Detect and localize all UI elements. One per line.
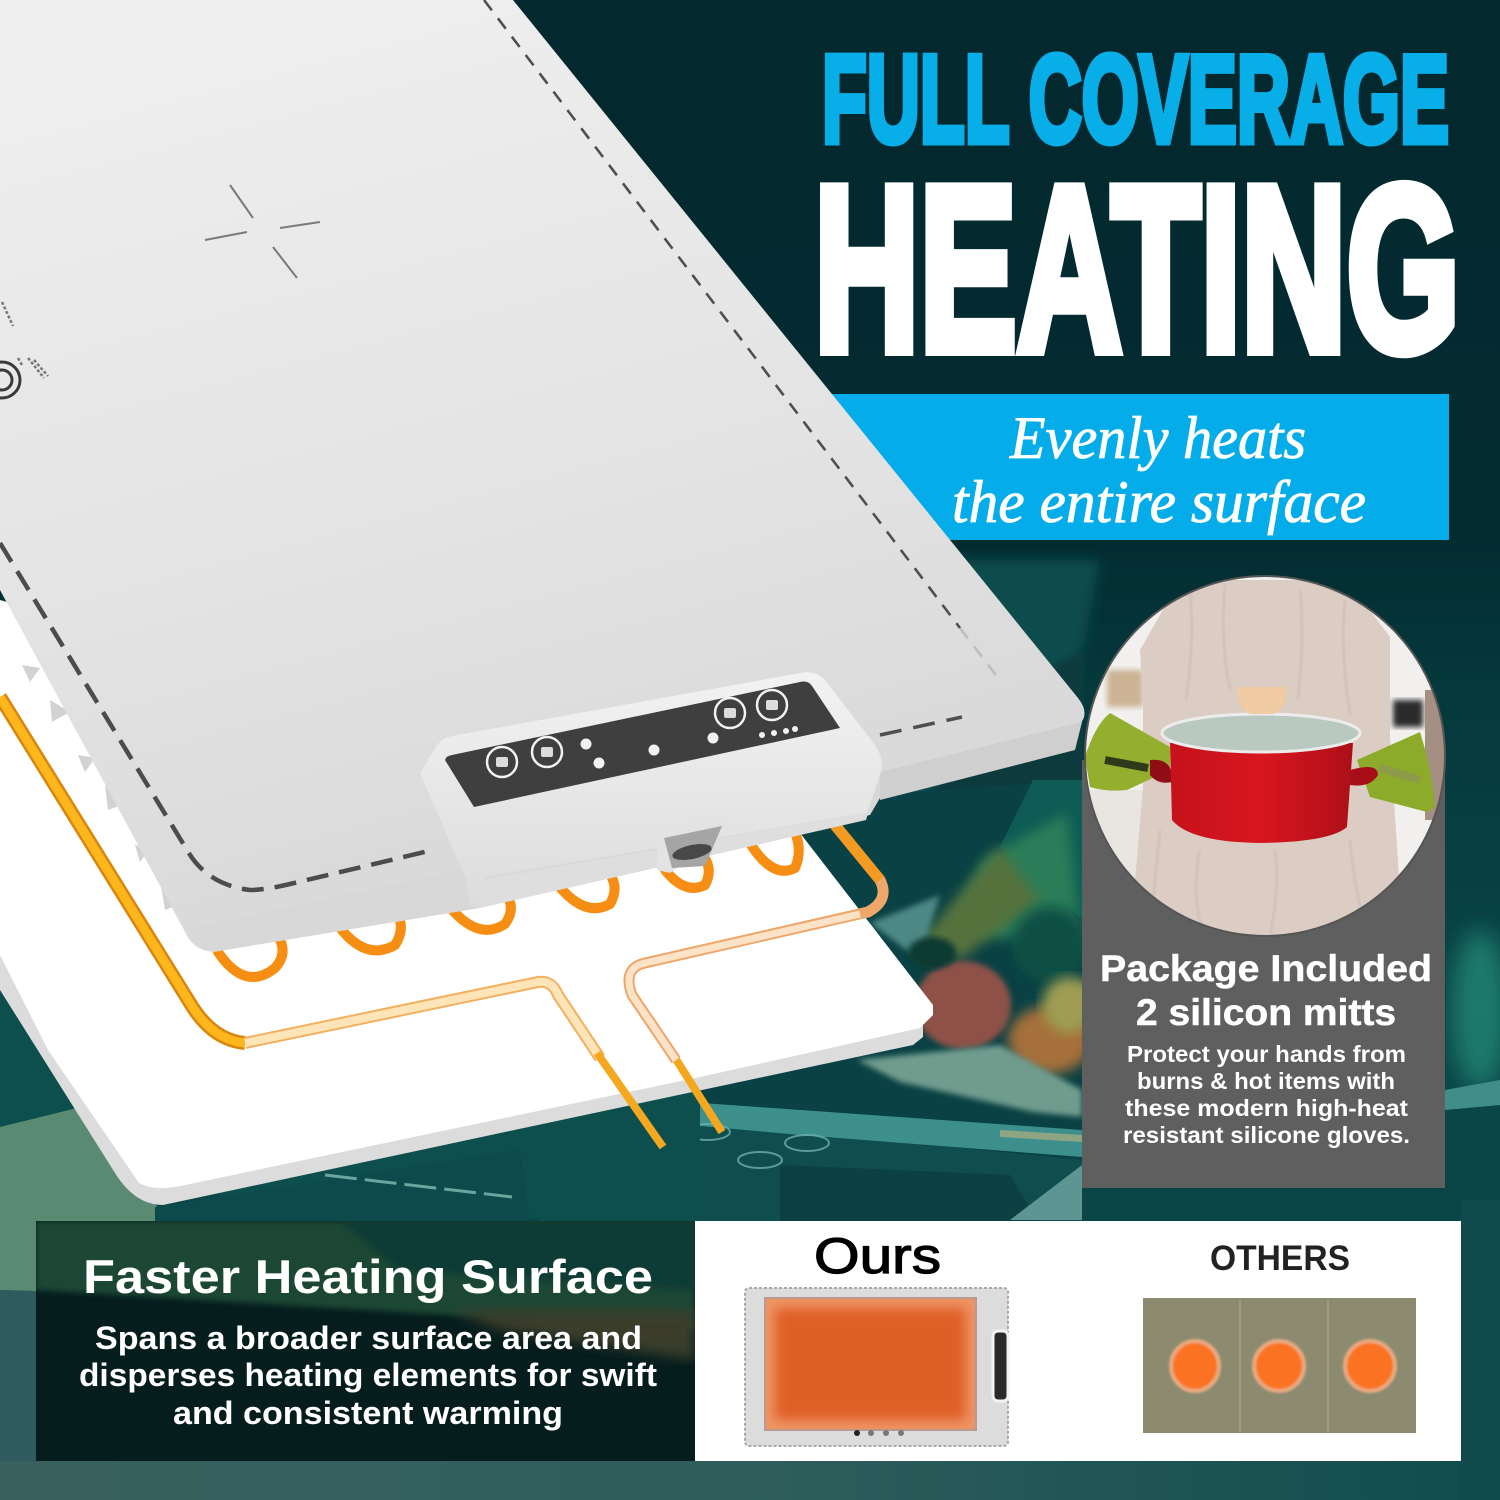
description: mitts: resistant silicone gloves. — [1123, 1122, 1410, 1148]
heading: 2 silicon mitts: 2 silicon mitts — [1136, 992, 1396, 1033]
description: mitts: Protect your hands from — [1127, 1041, 1406, 1067]
button labels — [496, 700, 778, 767]
panel: faster heating surface — [36, 1221, 695, 1461]
control display — [445, 682, 840, 807]
description: and consistent warming — [173, 1395, 563, 1431]
description: mitts: burns & hot items with — [1137, 1068, 1395, 1094]
control panel — [420, 672, 882, 908]
panel: package included — [1080, 570, 1450, 1188]
banner text line 1: Evenly heats — [1009, 405, 1306, 471]
top plate — [0, 0, 1085, 952]
heading: package included: Package Included — [1100, 948, 1432, 989]
icon: centre cross mark — [205, 185, 320, 278]
banner text line 2: the entire surface — [952, 469, 1366, 535]
power socket — [657, 817, 731, 873]
panel: comparison — [695, 1221, 1461, 1461]
description — [79, 1320, 657, 1431]
teeth — [22, 665, 178, 910]
description: Spans a broader surface area and — [95, 1320, 642, 1356]
photo: pot with silicone mitts — [1080, 570, 1450, 940]
label: ours: Ours — [814, 1228, 941, 1284]
description: mitts: these modern high-heat — [1125, 1095, 1408, 1121]
heating coils — [218, 835, 799, 977]
background — [0, 554, 1500, 1500]
lower heating plate — [0, 600, 933, 1205]
description: disperses heating elements for swift — [79, 1357, 657, 1393]
heating tube — [0, 697, 883, 1147]
buttons — [487, 690, 787, 777]
indicator lights — [580, 726, 798, 768]
image: ours hotplate — [745, 1288, 1008, 1446]
stitch lines — [484, 0, 960, 628]
icon: safety logo — [0, 302, 48, 398]
banner: evenly heats — [815, 394, 1449, 540]
cooktop icons — [700, 1123, 830, 1169]
pot — [1170, 743, 1353, 843]
mitts — [1085, 713, 1170, 791]
heading: Faster Heating Surface — [83, 1250, 653, 1303]
label: others: OTHERS — [1210, 1239, 1350, 1278]
image: others hotplate — [1143, 1298, 1416, 1433]
description: mitts — [1123, 1041, 1410, 1148]
